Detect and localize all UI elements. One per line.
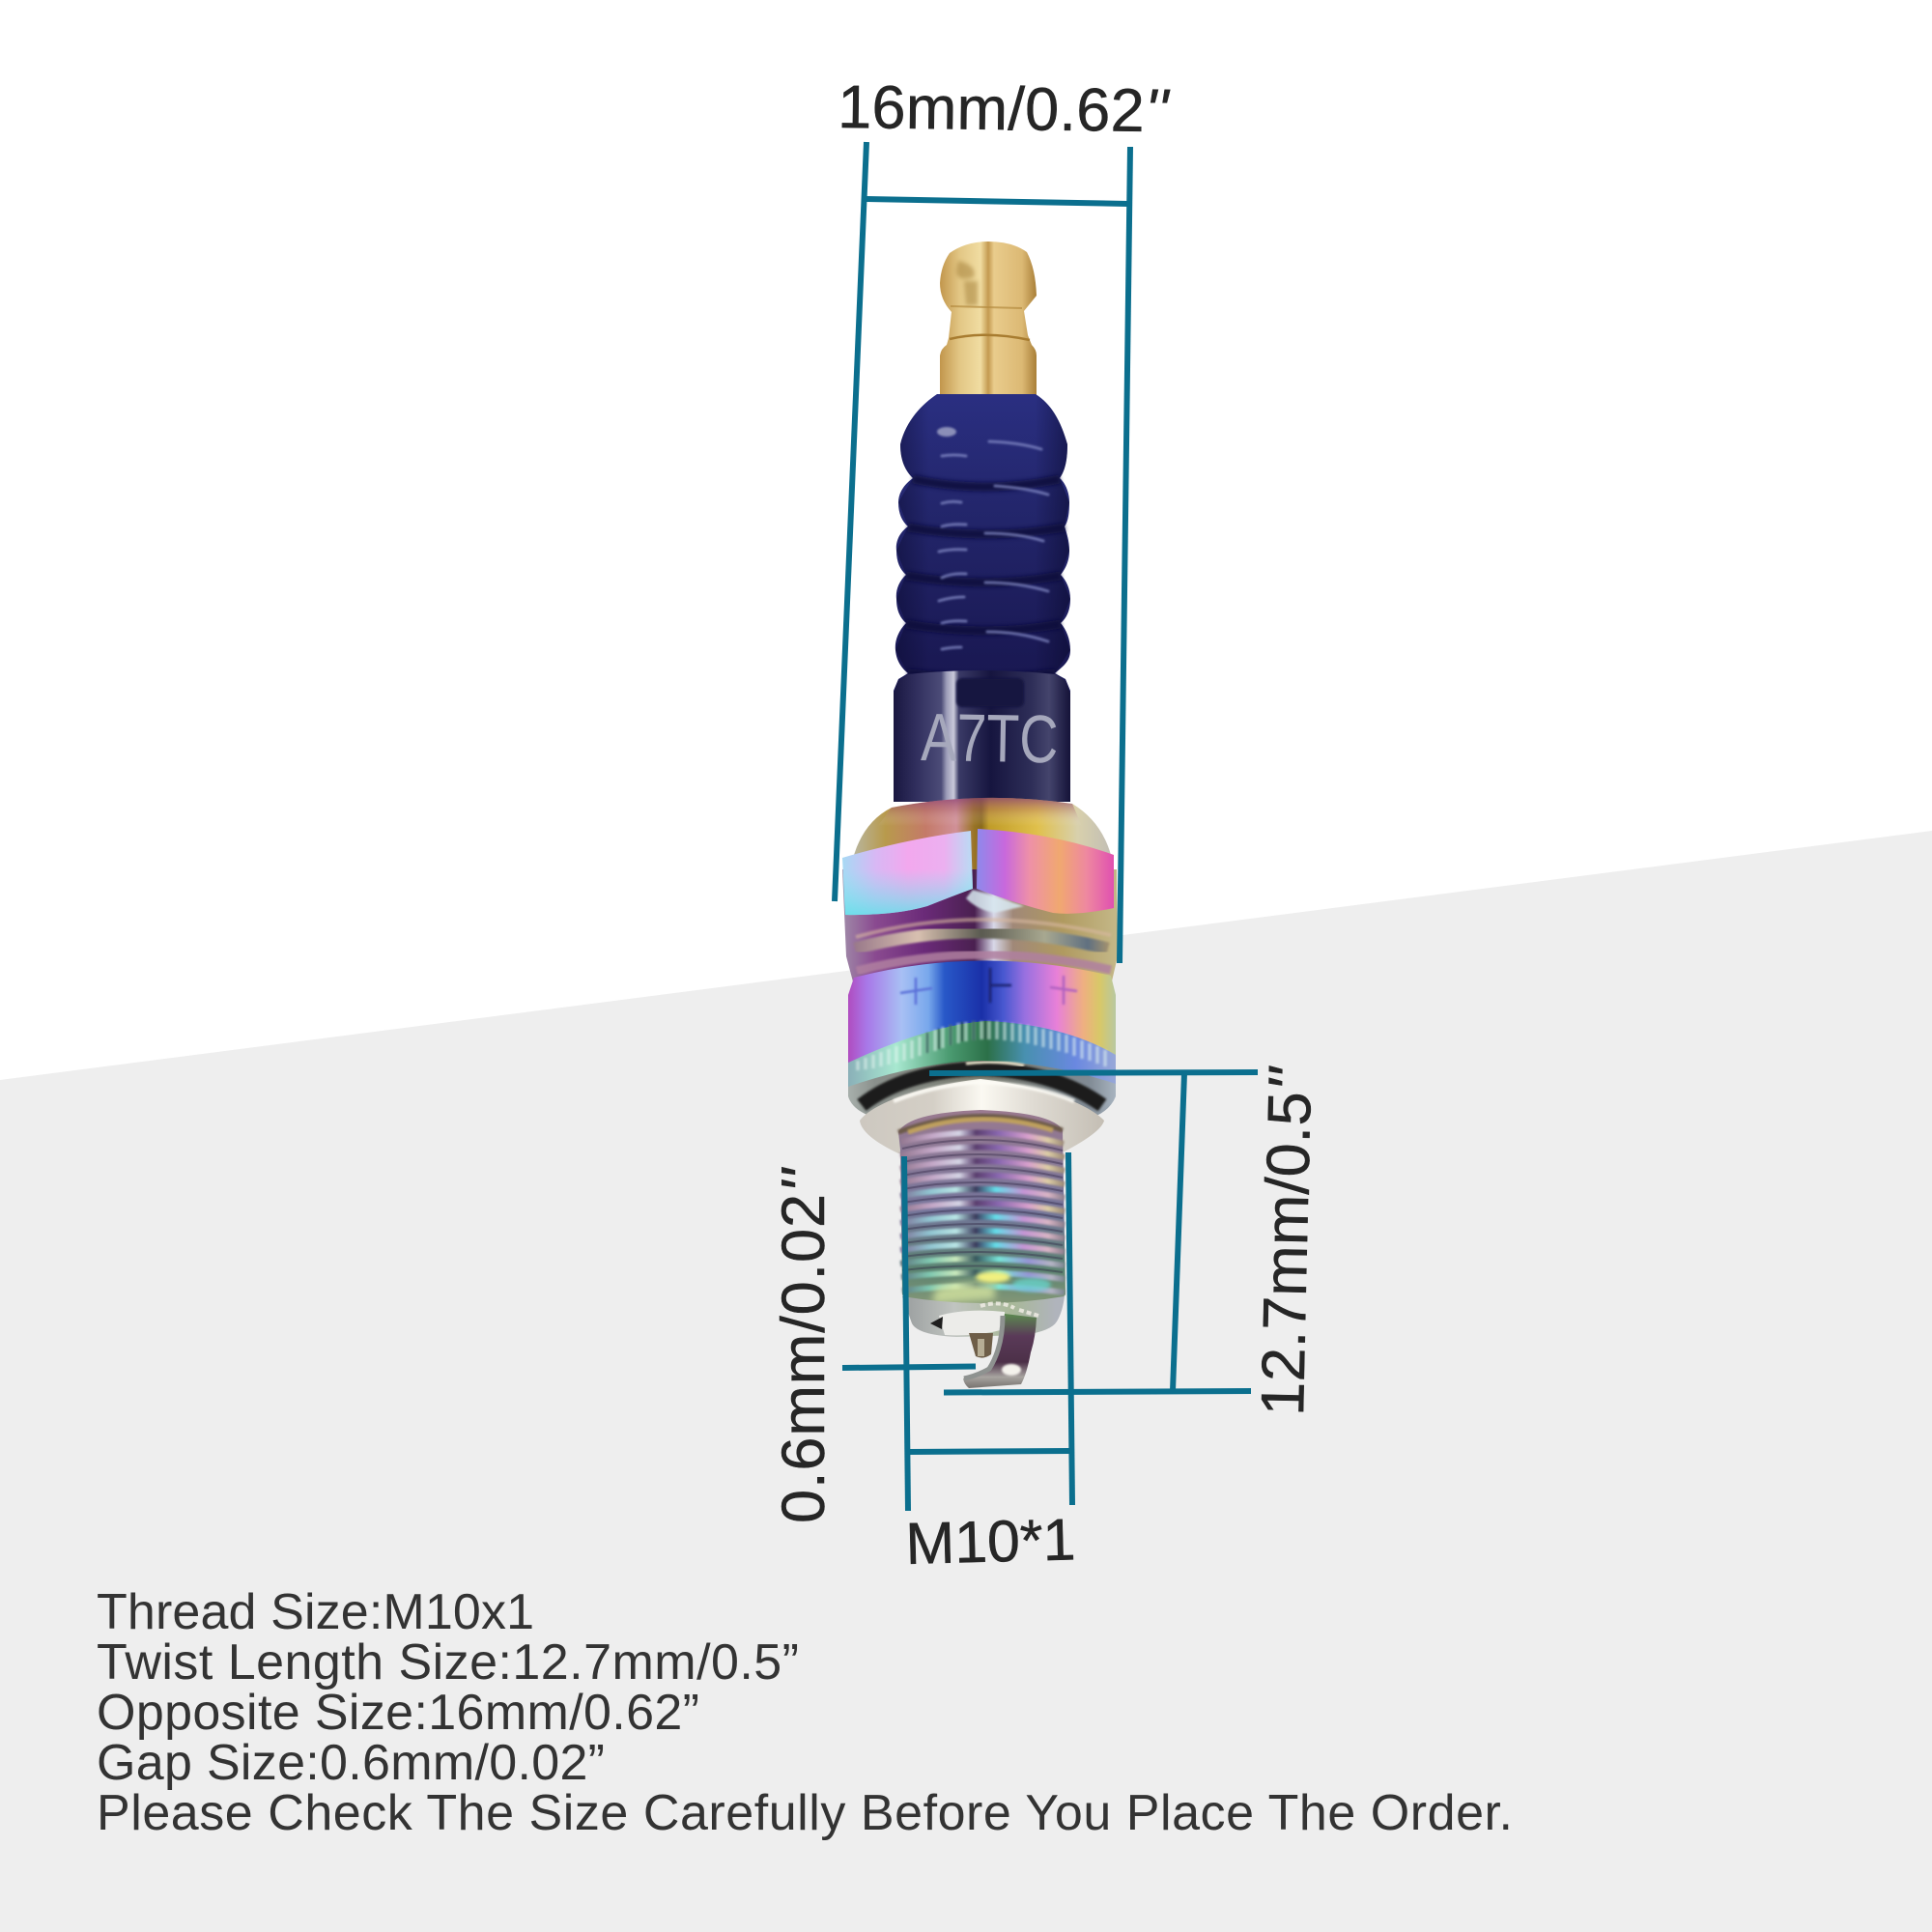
brass terminal tip — [940, 242, 1037, 396]
electrode base — [902, 1296, 1065, 1337]
ground strap — [963, 1314, 1037, 1388]
label: 0.6mm/0.02: 0.6mm/0.02'' — [770, 1167, 838, 1523]
threaded section — [898, 1110, 1065, 1310]
silver washer — [860, 1079, 1104, 1153]
centre facet highlight — [966, 890, 1024, 913]
hex nut dome — [854, 798, 1111, 874]
dimension line: 0.6mm gap — [842, 1366, 976, 1368]
spec: twist length: Twist Length Size:12.7mm/0.5” — [97, 1634, 799, 1690]
body ring below hex — [842, 869, 1118, 985]
spec: thread size: Thread Size:M10x1 — [97, 1584, 534, 1640]
dark gasket — [848, 1061, 1116, 1116]
spec: size check note: Please Check The Size Carefully Before You Place The Order. — [97, 1785, 1513, 1841]
engraved cross marks — [900, 968, 1077, 1005]
knurled ring — [848, 1021, 1116, 1087]
label: M10*1: M10*1 — [905, 1506, 1076, 1577]
label: 16mm/0.62: 16mm/0.62'' — [838, 73, 1171, 145]
spec: opposite size: Opposite Size:16mm/0.62” — [97, 1685, 699, 1741]
centre electrode — [969, 1333, 993, 1358]
hex nut centre edge — [972, 829, 978, 890]
white ceramic insulator — [939, 1311, 1005, 1335]
blue ribbed insulator — [894, 394, 1070, 802]
label: 12.7mm/0.5: 12.7mm/0.5'' — [1249, 1065, 1324, 1416]
hex nut right face — [977, 829, 1114, 914]
dimension line: 16mm opposite size — [835, 142, 1130, 963]
hex nut left face — [842, 831, 973, 915]
iridescent body band — [848, 960, 1116, 1067]
spark plug illustration — [842, 242, 1118, 1388]
insulator neck with A7TC marking — [894, 670, 1070, 802]
model marking text: A7TC — [921, 699, 1059, 777]
dimension line: 12.7mm twist length — [929, 1072, 1258, 1393]
specification text block — [97, 1584, 1513, 1841]
dimension line: M10 thread — [904, 1152, 1072, 1511]
spec: gap size: Gap Size:0.6mm/0.02” — [97, 1735, 605, 1791]
